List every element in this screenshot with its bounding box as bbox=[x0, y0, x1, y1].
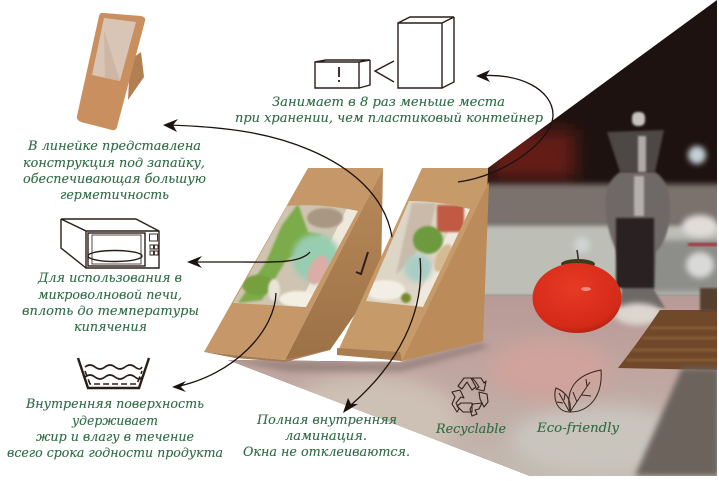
text: inner surface: всего срока годности продукта bbox=[7, 446, 223, 461]
icon: microwave bbox=[61, 219, 159, 268]
icon: small box versus large box bbox=[315, 17, 454, 88]
text: inner surface bbox=[7, 397, 223, 461]
text: full lamination: Окна не отклеиваются. bbox=[243, 445, 410, 460]
callout arrows bbox=[163, 70, 553, 413]
icon: leaves bbox=[555, 370, 601, 412]
text: storage space bbox=[235, 95, 544, 126]
background photo: kitchen counter bbox=[200, 0, 719, 481]
text: full lamination bbox=[243, 413, 410, 460]
box shadow bbox=[228, 343, 490, 372]
label: Eco-friendly: Eco-friendly bbox=[536, 421, 620, 436]
text: microwave use: кипячения bbox=[74, 320, 147, 335]
card window bbox=[92, 18, 136, 81]
text: sealed design: конструкция под запайку, bbox=[23, 156, 205, 171]
background highlights bbox=[688, 146, 706, 164]
text: storage space: при хранении, чем пластиковый контейнер bbox=[235, 111, 544, 126]
text: microwave use bbox=[22, 271, 199, 335]
text: inner surface: Внутренняя поверхность bbox=[25, 397, 204, 412]
icon: water-retaining tray bbox=[78, 358, 149, 388]
pepper mill bbox=[606, 112, 670, 325]
text: storage space: Занимает в 8 раз меньше места bbox=[272, 95, 505, 110]
product photo: open container card bbox=[77, 13, 145, 130]
label: Recyclable: Recyclable bbox=[435, 422, 506, 437]
text: microwave use: вплоть до температуры bbox=[22, 304, 199, 319]
text: sealed design bbox=[23, 139, 206, 203]
right box window with sandwich bbox=[366, 201, 470, 307]
left sandwich box bbox=[204, 168, 383, 362]
right sandwich box bbox=[337, 168, 489, 361]
text: inner surface: жир и влагу в течение bbox=[36, 430, 194, 445]
blurred red object bbox=[490, 130, 575, 180]
text: microwave use: Для использования в bbox=[37, 271, 182, 286]
grey shelf band bbox=[470, 184, 719, 224]
counter top bbox=[200, 296, 719, 481]
text: sealed design: герметичность bbox=[60, 188, 169, 203]
text: microwave use: микроволновой печи, bbox=[38, 288, 182, 303]
text: full lamination: Полная внутренняя bbox=[256, 413, 397, 428]
text: sealed design: обеспечивающая большую bbox=[23, 172, 206, 187]
icon: recycling symbol bbox=[452, 378, 488, 416]
placemat bbox=[618, 310, 719, 370]
photo: tomato bbox=[532, 250, 622, 333]
text: inner surface: удерживает bbox=[71, 414, 158, 429]
lower right dark corner bbox=[635, 368, 719, 476]
text: sealed design: В линейке представлена bbox=[27, 139, 201, 154]
pale wall bbox=[470, 224, 719, 298]
left box window with sandwich bbox=[233, 205, 358, 307]
text: full lamination: ламинация. bbox=[285, 429, 367, 444]
